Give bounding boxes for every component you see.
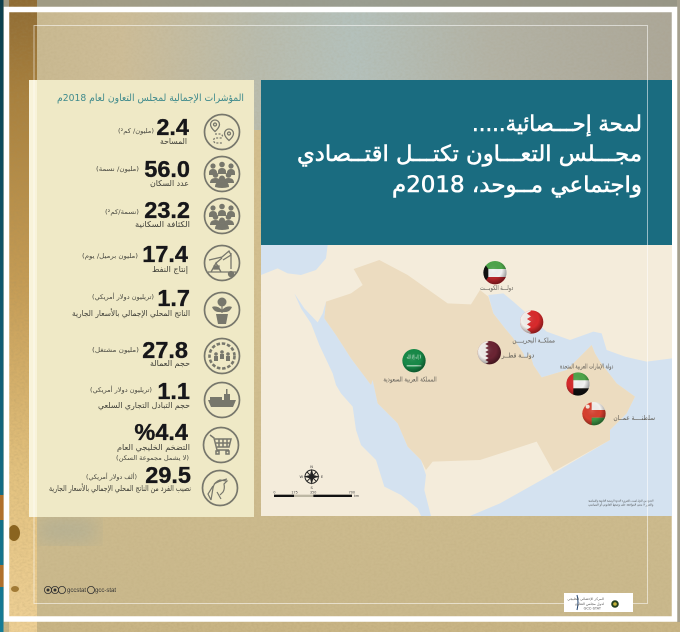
water: Red Sea (294, 293, 431, 516)
panel: title banner (261, 80, 672, 245)
row: GDP per capita (49, 462, 238, 506)
compass: S (311, 486, 314, 490)
row: area: 2.4 (156, 114, 189, 140)
row: trade (90, 378, 240, 418)
scale bar: 350 (310, 490, 316, 494)
row: oil: إنتاج النفط (152, 265, 188, 275)
map note: والجزر لا يعني الموافقة على وضعها القانوني أو السياسي (588, 502, 654, 506)
panel heading: المؤشرات الإجمالية لمجلس التعاون لعام 2018م (57, 93, 244, 104)
row: GDP (72, 285, 240, 328)
icon: map route (204, 114, 240, 150)
scale bar: 175 (291, 490, 298, 494)
social handles (44, 586, 116, 594)
row: density: الكثافة السكانية (135, 220, 190, 229)
water: Mediterranean (261, 245, 328, 275)
logo (564, 593, 633, 612)
title (297, 112, 642, 198)
map note: الحدود بين الدول ليست بالضرورة الحدود الرسمية القانونية والسياسية (588, 499, 654, 502)
title: مجـــلس التعـــاون تكتـــل اقتــصادي (297, 142, 642, 167)
row: labour: (مليون مشتغل) (92, 346, 139, 354)
row: trade: 1.1 (157, 378, 190, 404)
flag: Saudi Arabia (402, 349, 426, 372)
land: GCC countries (324, 260, 635, 472)
icon: gear with workers (204, 338, 240, 374)
row: oil: 17.4 (142, 241, 188, 267)
row: labour (92, 337, 240, 374)
row: oil (82, 241, 240, 280)
logo: المركز الإحصائي الخليجي (567, 597, 604, 602)
row: inflation: %4.4 (134, 419, 188, 445)
label: Bahrain: مملكــة البحريــــن (512, 337, 555, 345)
flag: UAE (566, 372, 590, 396)
row: inflation: التضخم الخليجي العام (117, 443, 190, 452)
row: GDP: الناتج المحلي الإجمالي بالأسعار الجارية (72, 308, 190, 319)
panel: map (261, 245, 672, 516)
row: population: 56.0 (144, 156, 190, 182)
compass: W (300, 475, 304, 479)
wood strip (8, 0, 37, 632)
title: لمحة إحـــصائية..... (472, 112, 642, 137)
row: area: المساحة (160, 137, 187, 146)
flag: Saudi Arabia: لا إله إلا الله (407, 355, 421, 361)
row: inflation (116, 419, 238, 462)
flag: Qatar (478, 341, 501, 364)
social handles: gccstat (67, 588, 86, 594)
row: inflation: (لا يشمل مجموعة السكن) (116, 454, 189, 462)
row: area (118, 114, 240, 150)
flag: Oman (582, 402, 606, 426)
compass: N (310, 465, 313, 469)
row: labour: 27.8 (142, 337, 188, 363)
flag: Bahrain (520, 310, 544, 334)
icon: money plant (204, 292, 240, 328)
row: density: (نسمة/كم²) (105, 208, 139, 216)
social handles: gcc-stat (95, 588, 116, 594)
label: UAE: دولة الإمارات العربية المتحدة (560, 363, 613, 371)
scale bar: km (354, 494, 359, 498)
icon: oil pump (204, 246, 240, 280)
icon: cargo ship (204, 382, 240, 418)
row: GDP: (تريليون دولار أمريكي) (92, 292, 154, 301)
row: GDP per capita: نصيب الفرد من الناتج المحلي الإجمالي بالأسعار الجارية (49, 483, 191, 494)
row: oil: (مليون برميل/ يوم) (82, 252, 138, 260)
row: density (105, 197, 240, 234)
row: population (96, 156, 240, 192)
icon: people (204, 156, 240, 192)
row: GDP per capita: 29.5 (145, 462, 191, 488)
label: Qatar: دولـــة قطــر (501, 352, 534, 360)
icon: person head (202, 470, 238, 506)
water: Gulf and Arabian Sea (470, 293, 672, 516)
row: GDP per capita: (ألف دولار أمريكي) (86, 472, 137, 481)
row: population: عدد السكان (150, 179, 189, 188)
compass: E (321, 475, 324, 479)
row: area: (مليون/ كم²) (118, 127, 154, 135)
row: GDP: 1.7 (157, 285, 190, 311)
icon: people density (204, 198, 240, 234)
row: population: (مليون/ نسمة) (96, 165, 139, 173)
row: density: 23.2 (144, 197, 190, 223)
label: Saudi Arabia: المملكة العربية السعودية (383, 376, 437, 384)
logo: GCC-STAT (584, 606, 602, 610)
map note (588, 499, 654, 506)
icon: shopping cart (204, 428, 238, 462)
row: trade: (تريليون دولار أمريكي) (90, 385, 152, 394)
label: Kuwait: دولـــة الكويـــت (480, 284, 513, 292)
row: trade: حجم التبادل التجاري السلعي (98, 401, 190, 410)
scale bar: 0 (273, 490, 275, 494)
label: Oman: سلطنــــة عمــان (613, 414, 655, 422)
panel: indicators (29, 80, 254, 517)
scale bar (273, 490, 359, 498)
row: labour: حجم العمالة (150, 359, 190, 368)
logo: لدول مجلس التعاون (575, 602, 604, 606)
scale bar: 700 (349, 490, 355, 494)
compass (300, 465, 324, 490)
flag: Kuwait (483, 261, 507, 284)
title: واجتماعي مــوحد، 2018م (392, 173, 642, 198)
